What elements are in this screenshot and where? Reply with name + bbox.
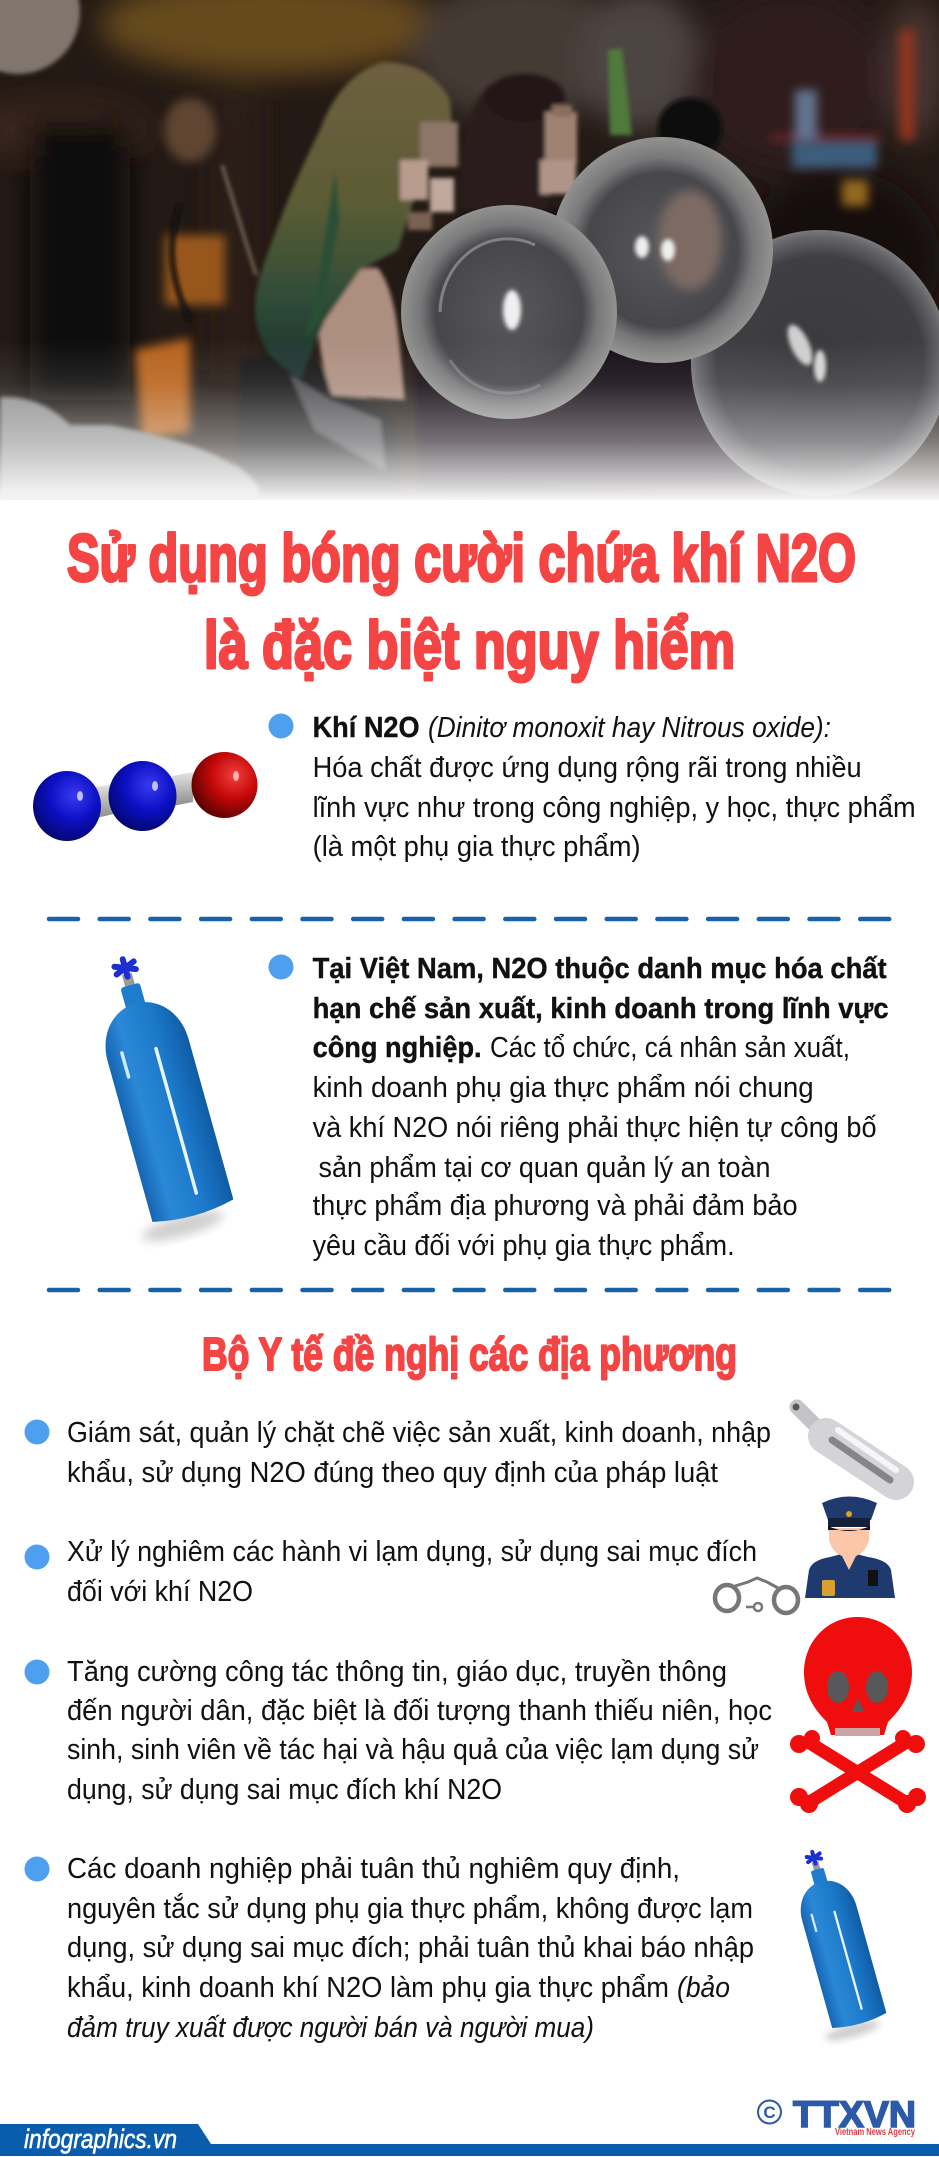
bullet <box>24 1660 50 1684</box>
logo: TTXVN: C <box>763 2103 776 2122</box>
panel: N2O definition <box>33 712 916 863</box>
logo: TTXVN: TTXVN <box>793 2094 916 2135</box>
icon: blue gas cylinder <box>69 948 239 1247</box>
panel: item 3 education <box>24 1617 926 1813</box>
text: item 4: nguyên tắc sử dụng phụ gia thực phẩm, không được lạm <box>67 1892 753 1925</box>
panel: item 4 businesses <box>24 1844 890 2045</box>
woman 1 hair <box>255 62 452 380</box>
woman 1 jacket <box>235 350 400 490</box>
bullet <box>24 1544 50 1570</box>
text: item 1 <box>67 1417 771 1489</box>
icon: small blue gas cylinder <box>776 1844 890 2045</box>
bullet <box>24 1420 50 1444</box>
text: item 3: Tăng cường công tác thông tin, giáo dục, truyền thông <box>67 1656 727 1688</box>
title: là đặc biệt nguy hiểm <box>204 608 735 683</box>
bullet <box>268 954 294 980</box>
balloon 2 <box>551 137 773 363</box>
bullet <box>24 1856 50 1882</box>
text: item 4 <box>67 1853 754 2044</box>
text: N2O description: lĩnh vực như trong công nghiệp, y học, thực phẩm <box>313 792 916 824</box>
photo: people inhaling from balloons <box>0 0 939 515</box>
text: item 1: khẩu, sử dụng N2O đúng theo quy định của pháp luật <box>67 1457 718 1489</box>
panel: item 1 monitoring <box>24 1404 896 1489</box>
text: regulation description: thực phẩm địa phương và phải đảm bảo <box>313 1190 798 1222</box>
text: item 3 <box>67 1656 772 1806</box>
icon: police officer <box>805 1496 895 1598</box>
wire <box>222 165 256 275</box>
woman 2 face <box>545 112 577 164</box>
text: regulation description: yêu cầu đối với phụ gia thực phẩm. <box>313 1230 735 1262</box>
woman 1 skin back <box>319 268 405 400</box>
text: regulation description: sản phẩm tại cơ quan quản lý an toàn <box>318 1152 770 1184</box>
text: N2O description: (là một phụ gia thực phẩm) <box>313 831 641 863</box>
text: item 4: dụng, sử dụng sai mục đích; phải tuân thủ khai báo nhập <box>67 1932 754 1964</box>
text: regulation description: và khí N2O nói riêng phải thực hiện tự công bố <box>313 1112 877 1144</box>
text: item 4: (bảo <box>677 1972 730 2004</box>
bullet <box>268 714 294 738</box>
icon: N2O molecule <box>33 752 258 841</box>
woman 1 face <box>420 122 458 167</box>
text: regulation description: Tại Việt Nam, N2O thuộc danh mục hóa chất <box>313 953 887 985</box>
logo: TTXVN: Vietnam News Agency <box>835 2127 915 2138</box>
text: item 3: sinh, sinh viên về tác hại và hậu quả của việc lạm dụng sử <box>67 1734 759 1766</box>
icon: silver gas capsule <box>792 1404 896 1482</box>
text: item 2: đối với khí N2O <box>67 1576 253 1608</box>
bottom-left light shape <box>0 397 258 496</box>
top greenish object <box>608 48 632 135</box>
text: N2O description: (Dinitơ monoxit hay Nitrous oxide): <box>428 712 831 744</box>
title <box>67 521 856 683</box>
text: item 3: đến người dân, đặc biệt là đối tượng thanh thiếu niên, học <box>67 1695 772 1727</box>
lower body dark <box>410 210 780 496</box>
balloon 1 <box>401 205 617 419</box>
text: regulation description <box>313 953 889 1262</box>
heading: Ministry of Health requests: Bộ Y tế đề nghị các địa phương <box>202 1328 737 1380</box>
woman 2 hair <box>462 77 570 215</box>
icon: red skull and crossbones <box>790 1617 926 1813</box>
text: regulation description: hạn chế sản xuất, kinh doanh trong lĩnh vực <box>313 993 889 1025</box>
text: regulation description: Các tổ chức, cá nhân sản xuất, <box>490 1032 850 1064</box>
text: item 4: đảm truy xuất được người bán và người mua) <box>67 2012 594 2044</box>
text: item 4: Các doanh nghiệp phải tuân thủ nghiêm quy định, <box>67 1853 680 1885</box>
text: N2O description: Khí N2O <box>313 712 420 744</box>
panel: item 2 enforcement <box>24 1496 895 1613</box>
text: regulation description: kinh doanh phụ gia thực phẩm nói chung <box>313 1072 814 1104</box>
text: item 1: Giám sát, quản lý chặt chẽ việc sản xuất, kinh doanh, nhập <box>67 1417 771 1449</box>
text: item 4: khẩu, kinh doanh khí N2O làm phụ gia thực phẩm <box>67 1972 669 2004</box>
icon: handcuffs <box>715 1578 798 1613</box>
text: regulation description: công nghiệp. <box>313 1032 482 1064</box>
text: item 2 <box>67 1536 757 1608</box>
text: N2O description: Hóa chất được ứng dụng rộng rãi trong nhiều <box>313 752 862 784</box>
top-left balloon <box>0 0 80 74</box>
text: item 2: Xử lý nghiêm các hành vi lạm dụng, sử dụng sai mục đích <box>67 1536 757 1568</box>
white fade <box>0 340 939 515</box>
panel: regulation in Vietnam <box>69 948 889 1262</box>
footer bar: infographics.vn: infographics.vn <box>24 2124 177 2154</box>
third person head <box>658 98 722 158</box>
balloon 3 <box>691 230 939 496</box>
text: item 3: dụng, sử dụng sai mục đích khí N2O <box>67 1774 502 1806</box>
footer bar: infographics.vn <box>0 2124 939 2156</box>
text: N2O description <box>313 712 916 863</box>
